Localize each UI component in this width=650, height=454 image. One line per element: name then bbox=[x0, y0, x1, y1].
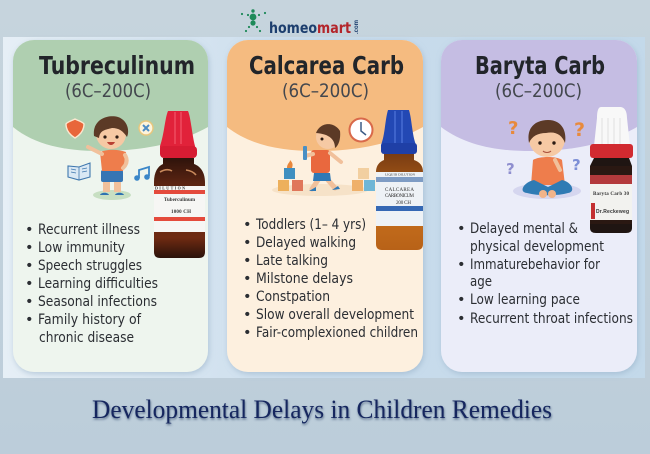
potency range: (6C–200C) bbox=[65, 80, 151, 102]
panel: Calcarea Carb bbox=[227, 40, 423, 372]
symptom list: • bbox=[243, 289, 252, 305]
illustration: toddler walking with blocks and clock bbox=[272, 118, 375, 196]
symptom list: Fair-complexioned children bbox=[256, 325, 418, 341]
symptom list: chronic disease bbox=[39, 330, 134, 346]
symptom list: • bbox=[243, 325, 252, 341]
panel: Baryta Carb bbox=[441, 40, 637, 372]
bottle: Tubreculinum bbox=[154, 111, 205, 258]
symptom list: Seasonal infections bbox=[38, 294, 157, 310]
symptom list: Toddlers (1– 4 yrs) bbox=[255, 217, 366, 233]
symptom list: • bbox=[243, 253, 252, 269]
heading: Tubreculinum: Tubreculinum bbox=[39, 51, 195, 80]
logo: homeomart: homeomart bbox=[269, 19, 351, 37]
symptom list: Immaturebehavior for bbox=[470, 257, 600, 273]
symptom list: • bbox=[243, 217, 252, 233]
illustration: child with book and music note bbox=[66, 116, 153, 200]
symptom list: Recurrent illness bbox=[38, 222, 140, 238]
bottle: Baryta Carb: Baryta Carb 30 bbox=[593, 192, 630, 197]
illustration: thinking child: ? bbox=[508, 118, 518, 139]
background panel bbox=[3, 37, 645, 378]
symptom list: Late talking bbox=[256, 253, 328, 269]
bottle: Baryta Carb bbox=[590, 107, 633, 233]
symptom list: • bbox=[457, 292, 466, 308]
symptom list: • bbox=[25, 294, 34, 310]
symptom list bbox=[25, 222, 158, 346]
bottle: Tubreculinum: DILUTION bbox=[155, 186, 185, 190]
symptom list: Delayed mental & bbox=[470, 221, 578, 237]
title: Developmental Delays in Children Remedies bbox=[92, 395, 552, 424]
symptom list: Low immunity bbox=[38, 240, 125, 256]
illustration: thinking child bbox=[506, 118, 585, 199]
symptom list: • bbox=[243, 271, 252, 287]
heading: Calcarea Carb: Calcarea Carb bbox=[249, 51, 404, 80]
logo: homeomart bbox=[241, 9, 360, 37]
bottle: Calcarea Carb: LIQUID DILUTION bbox=[385, 172, 415, 176]
bottle: Tubreculinum: 1000 CH bbox=[171, 210, 191, 215]
symptom list: Slow overall development bbox=[256, 307, 414, 323]
symptom list: Constpation bbox=[256, 289, 330, 305]
symptom list: Milstone delays bbox=[256, 271, 353, 287]
illustration: thinking child: ? bbox=[506, 160, 515, 178]
symptom list: physical development bbox=[470, 239, 604, 255]
symptom list: • bbox=[457, 311, 466, 327]
bottle: Calcarea Carb bbox=[376, 110, 423, 250]
bottle: Tubreculinum: Tuberculinum bbox=[164, 198, 196, 203]
symptom list: Speech struggles bbox=[38, 258, 142, 274]
bottle: Calcarea Carb: CALCAREA bbox=[385, 188, 414, 193]
symptom list: Family history of bbox=[38, 312, 142, 328]
bottle: Baryta Carb: Dr.Reckeweg bbox=[596, 209, 629, 215]
illustration: thinking child: ? bbox=[572, 156, 581, 174]
symptom list: Low learning pace bbox=[470, 292, 580, 308]
logo: homeomart: .com bbox=[354, 20, 360, 34]
symptom list: • bbox=[457, 257, 466, 273]
panel: Tubreculinum bbox=[13, 40, 208, 372]
potency range: (6C–200C) bbox=[495, 80, 582, 102]
symptom list: • bbox=[25, 222, 34, 238]
symptom list: • bbox=[25, 240, 34, 256]
illustration: thinking child: ? bbox=[574, 119, 585, 141]
bottle: Calcarea Carb: CARBONICUM bbox=[385, 194, 415, 199]
symptom list bbox=[457, 221, 633, 327]
bottle: Calcarea Carb: 200 CH bbox=[396, 201, 411, 206]
potency range: (6C–200C) bbox=[282, 80, 369, 102]
header band: green bbox=[13, 40, 208, 151]
symptom list: Delayed walking bbox=[256, 235, 356, 251]
symptom list: • bbox=[243, 307, 252, 323]
symptom list: • bbox=[243, 235, 252, 251]
symptom list: • bbox=[25, 312, 34, 328]
symptom list bbox=[243, 217, 418, 341]
symptom list: • bbox=[25, 276, 34, 292]
symptom list: • bbox=[25, 258, 34, 274]
symptom list: Learning difficulties bbox=[38, 276, 158, 292]
symptom list: • bbox=[457, 221, 466, 237]
header band: purple bbox=[441, 40, 637, 151]
heading: Baryta Carb: Baryta Carb bbox=[475, 51, 605, 80]
header band: orange bbox=[227, 40, 423, 151]
symptom list: age bbox=[470, 274, 492, 290]
